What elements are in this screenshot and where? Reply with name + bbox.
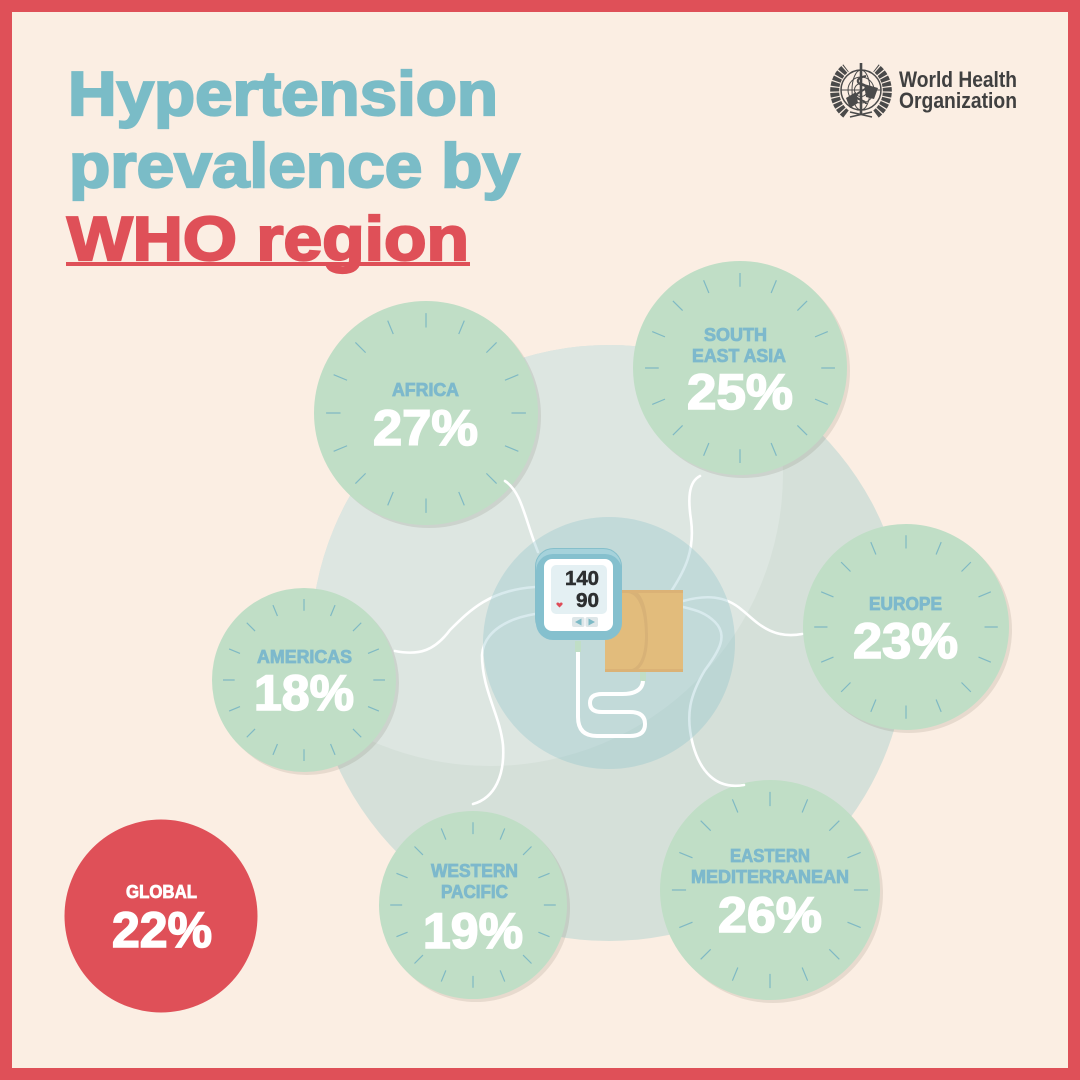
organisation name: World Health xyxy=(899,67,1017,92)
backdrop circles xyxy=(316,345,894,941)
title xyxy=(66,60,521,274)
icon: monitor body xyxy=(536,548,622,640)
panel: Eastern Mediterranean: EASTERN xyxy=(730,846,810,866)
WHO logo xyxy=(835,63,1017,117)
panel: Europe xyxy=(803,524,1012,733)
panel: Africa: 27% xyxy=(373,400,478,456)
panel: Global xyxy=(64,820,258,1012)
panel: South East Asia: EAST ASIA xyxy=(692,346,786,366)
icon: tube xyxy=(575,641,646,736)
panel: Africa xyxy=(314,301,541,528)
icon: WHO emblem xyxy=(835,63,887,117)
organisation name: Organization xyxy=(899,88,1017,113)
panel: South East Asia xyxy=(633,261,850,478)
panel: Americas: 18% xyxy=(254,665,354,721)
panel: Global: GLOBAL xyxy=(126,882,197,902)
panel: Americas xyxy=(212,588,399,775)
panel: Eastern Mediterranean: MEDITERRANEAN xyxy=(691,867,849,887)
panel: Western Pacific: PACIFIC xyxy=(441,882,508,902)
centre circle xyxy=(483,517,735,769)
icon: monitor body: 90 xyxy=(576,590,599,612)
panel: Europe: EUROPE xyxy=(869,594,942,614)
title: WHO region xyxy=(67,205,469,274)
panel: Americas: AMERICAS xyxy=(257,647,352,667)
panel: Eastern Mediterranean xyxy=(660,780,883,1003)
panel: Western Pacific: WESTERN xyxy=(431,861,518,881)
organisation name xyxy=(899,67,1017,113)
panel: Western Pacific: 19% xyxy=(423,903,523,959)
title: Hypertension xyxy=(68,60,498,129)
panel: Eastern Mediterranean: 26% xyxy=(718,887,822,943)
icon: cuff xyxy=(605,590,683,672)
panel: South East Asia: SOUTH xyxy=(704,325,767,345)
icon: blood pressure monitor xyxy=(536,548,683,736)
title: prevalence by xyxy=(69,132,521,201)
panel: Africa: AFRICA xyxy=(392,380,459,400)
panel: Western Pacific xyxy=(379,811,570,1002)
panel: South East Asia: 25% xyxy=(687,364,793,420)
panel: Europe: 23% xyxy=(853,613,958,669)
connector wires xyxy=(395,476,802,804)
panel: Global: 22% xyxy=(112,902,212,958)
icon: monitor body: 140 xyxy=(565,568,599,590)
